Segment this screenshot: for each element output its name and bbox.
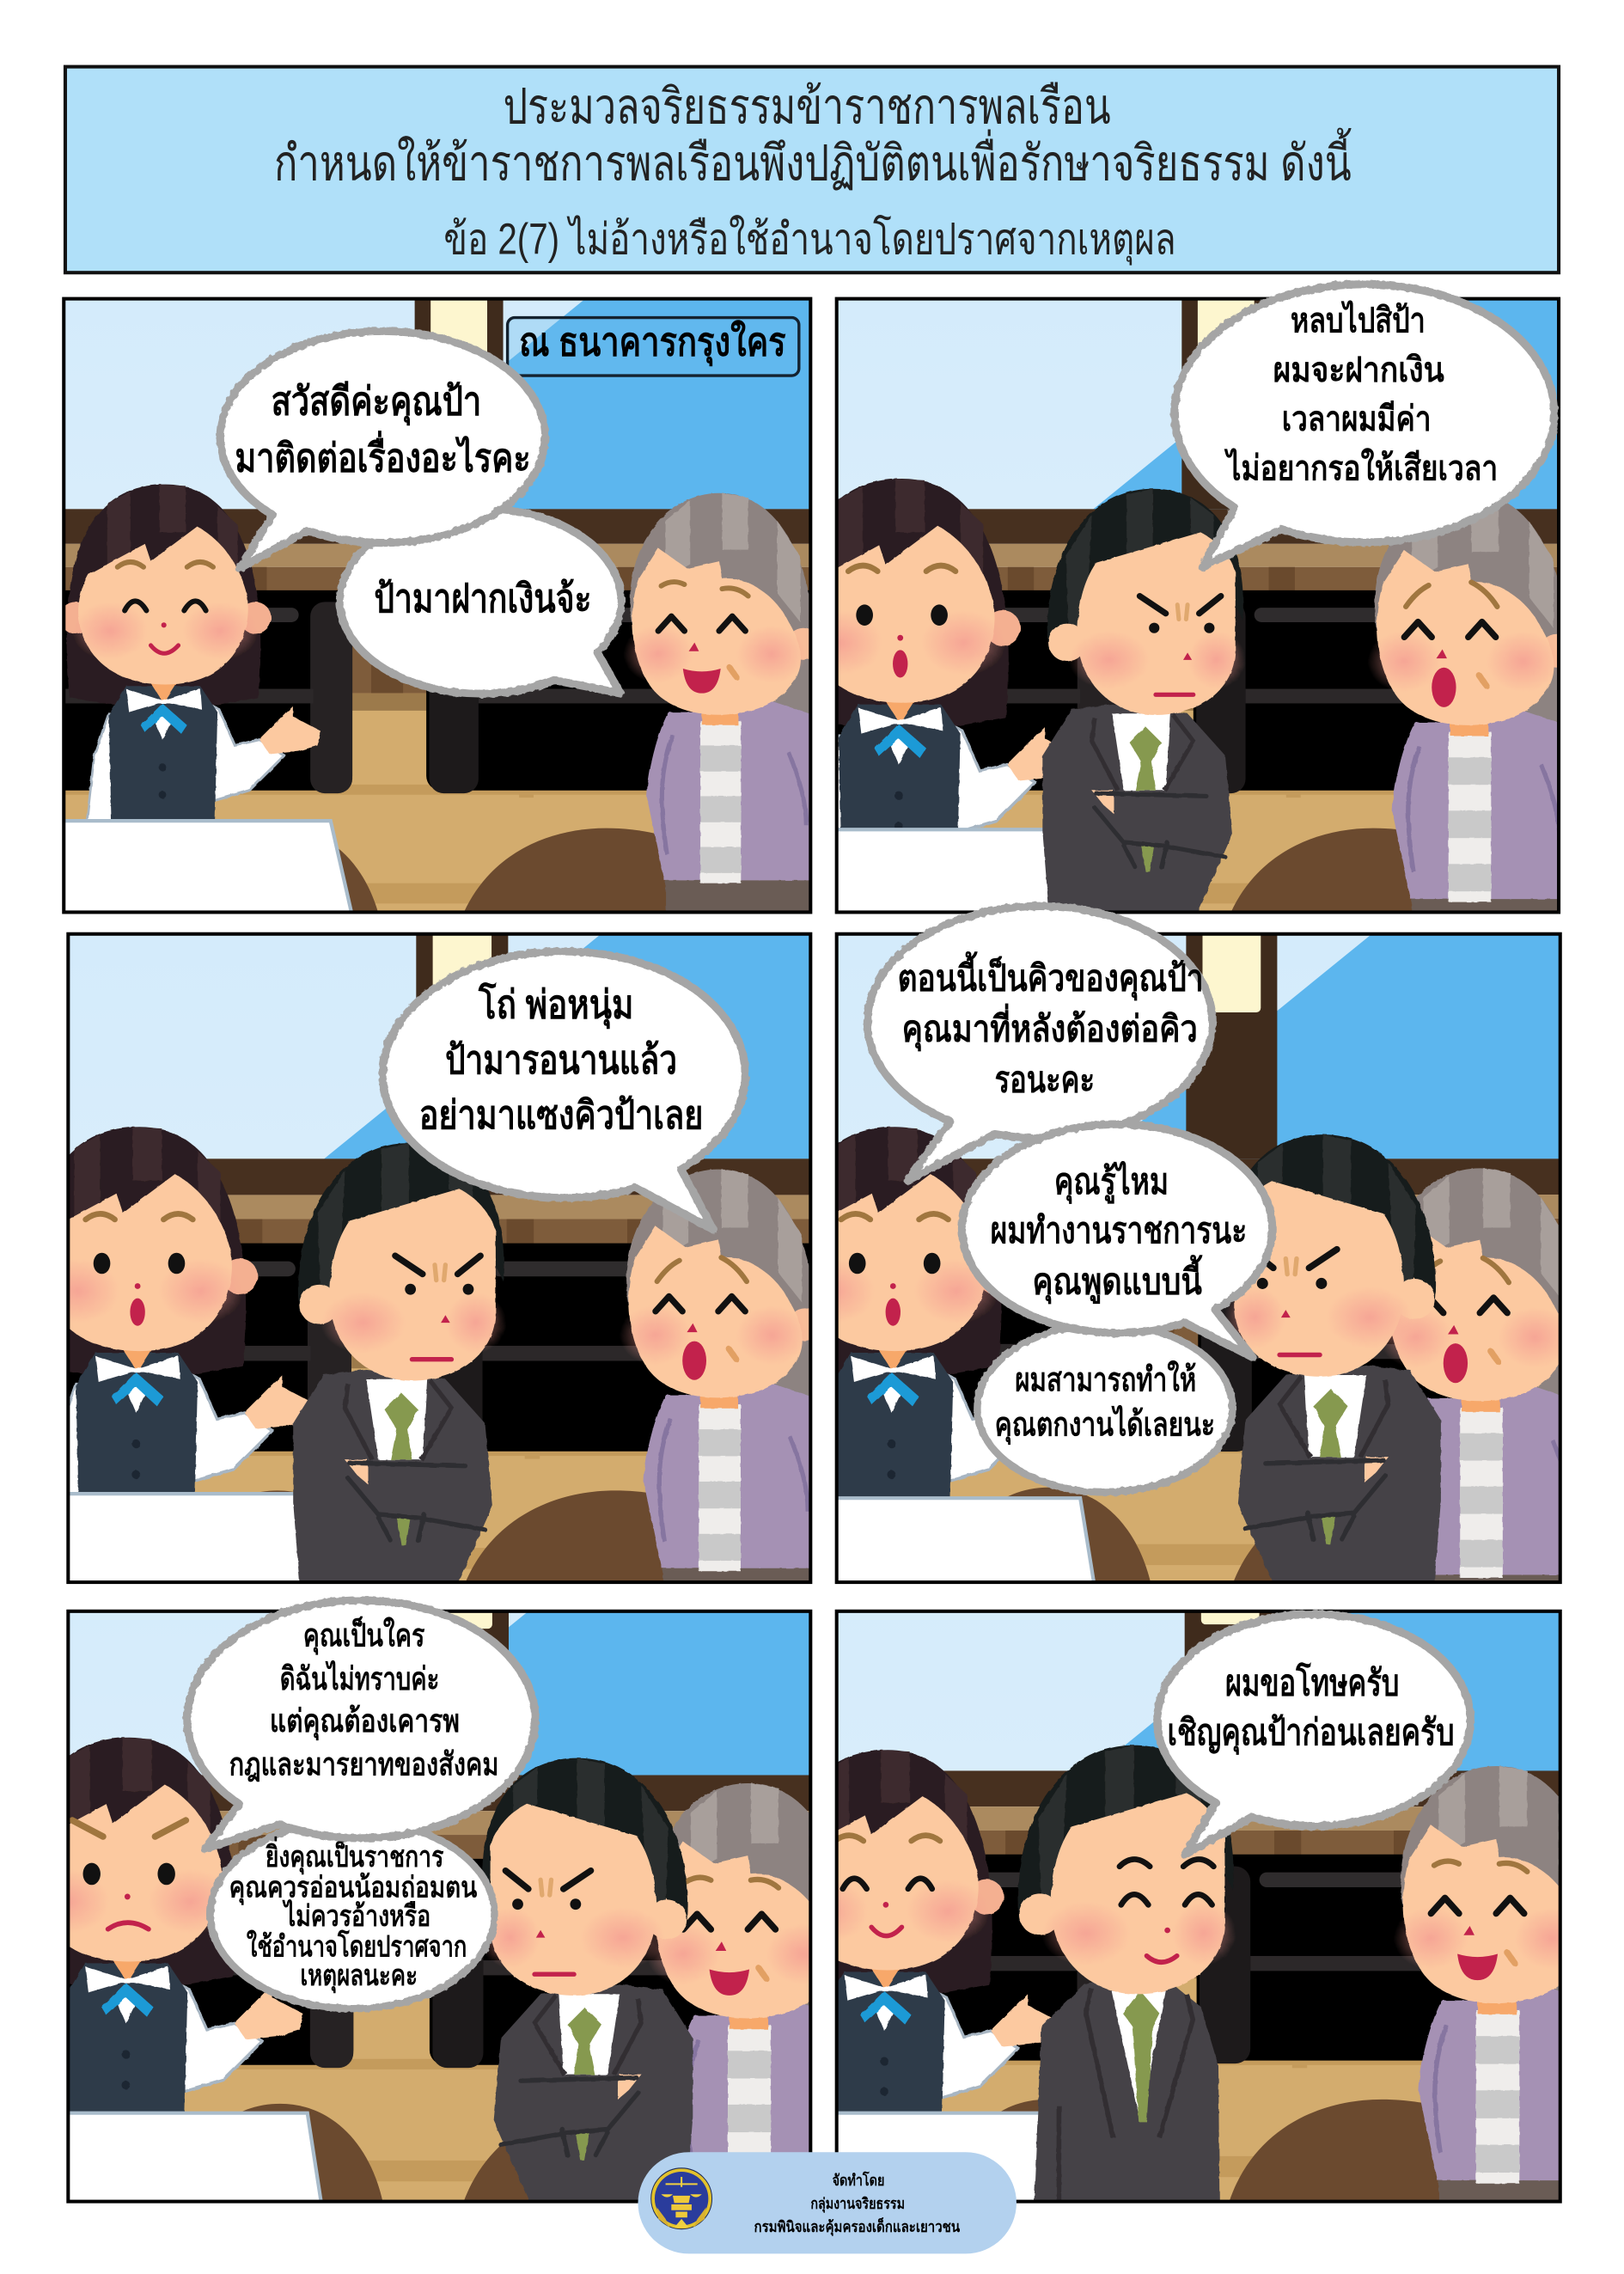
speech bubble: man: ผมจะฝากเงิน [1273, 350, 1444, 389]
panel 3 [66, 932, 813, 1585]
location label [508, 318, 799, 376]
speech bubble: grandmother: ป้ามาฝากเงินจ้ะ [374, 577, 591, 620]
woman clerk surprised [70, 1126, 308, 1492]
panel 2 [835, 279, 1560, 914]
credit text: กรมพินิจและคุ้มครองเด็กและเยาวชน [754, 2216, 961, 2236]
panel 5 scene [0, 1446, 1134, 2248]
speech bubble: clerk [220, 331, 545, 569]
speech bubble: clerk: คุณเป็นใคร [303, 1615, 424, 1655]
panel 6 [558, 1442, 1624, 2258]
speech bubble: clerk: สวัสดีค่ะคุณป้า [272, 380, 481, 426]
woman clerk surprised [776, 1127, 1068, 1586]
speech bubble: grandmother: ป้ามารอนานแล้ว [445, 1038, 677, 1082]
speech bubble: clerk advice: เหตุผลนะคะ [300, 1959, 418, 1994]
speech bubble: man: เวลาผมมีค่า [1282, 399, 1432, 438]
speech bubble: clerk: แต่คุณต้องเคารพ [270, 1702, 460, 1741]
location label: ณ ธนาคารกรุงใคร [519, 319, 786, 366]
panel 5 frame [68, 1611, 810, 2202]
speech bubble: grandmother [382, 951, 745, 1230]
speech bubble: clerk [187, 1600, 535, 1849]
counter [70, 1492, 300, 1581]
speech bubble: clerk advice: ไม่ควรอ้างหรือ [282, 1899, 430, 1933]
grandmother worried [620, 1169, 809, 1580]
credit text: จัดทำโดย [833, 2171, 884, 2189]
speech bubble: grandmother: โถ่ พ่อหนุ่ม [478, 981, 633, 1030]
grandmother worried [1379, 1168, 1585, 1616]
panel 4 [559, 830, 1624, 1633]
speech bubble: clerk advice: ใช้อำนาจโดยปราศจาก [247, 1929, 467, 1963]
speech bubble: clerk advice [211, 1820, 494, 2008]
speech bubble: clerk advice: ยิ่งคุณเป็นราชการ [266, 1836, 443, 1875]
grandmother laughing [1394, 1766, 1603, 2222]
civil servant man angry [1042, 489, 1246, 954]
grandmother pleased [646, 1783, 854, 2235]
speech bubble: clerk: ตอนนี้เป็นคิวของคุณป้า [898, 951, 1204, 1001]
speech bubble: clerk: มาติดต่อเรื่องอะไรคะ [235, 430, 531, 480]
panel 1 scene [65, 301, 809, 911]
civil servant man apologetic [1017, 1745, 1236, 2258]
speech bubble: man [1157, 1614, 1470, 1855]
civil servant man angry, facing left [479, 1758, 693, 2246]
counter [827, 1498, 1095, 1588]
panel 1 frame [64, 299, 810, 912]
panel 4 scene [559, 830, 1624, 1633]
civil servant man angry, facing left [1224, 1134, 1441, 1633]
speech bubble: man [962, 1124, 1273, 1358]
counter [827, 2113, 1088, 2207]
speech bubble: clerk: รอนะคะ [995, 1060, 1095, 1100]
counter [58, 2113, 322, 2207]
panel 6 frame [837, 1611, 1560, 2202]
panel 4 frame [837, 934, 1560, 1582]
panel 6 scene [558, 1442, 1624, 2258]
grandmother laughing [624, 493, 819, 920]
panel 3 frame [68, 934, 810, 1582]
speech bubble: man: คุณรู้ไหม [1054, 1160, 1169, 1204]
panel 2 scene [839, 301, 1557, 911]
panel 2 frame [837, 299, 1559, 912]
speech bubble: clerk advice: คุณควรอ่อนน้อมถ่อมตน [229, 1871, 477, 1905]
speech bubble: clerk [867, 906, 1212, 1181]
speech bubble: man threat: คุณตกงานได้เลยนะ [995, 1405, 1215, 1446]
panel 5 [0, 1446, 1134, 2248]
icon: department seal [651, 2168, 712, 2229]
speech bubble: man: เชิญคุณป้าก่อนเลยครับ [1167, 1712, 1455, 1755]
speech bubble: grandmother: อย่ามาแซงคิวป้าเลย [419, 1093, 703, 1137]
woman clerk surprised [839, 478, 1052, 828]
footer credit pill [638, 2152, 1017, 2253]
speech bubble: clerk: คุณมาที่หลังต้องต่อคิว [902, 1004, 1198, 1052]
panel 1 [62, 297, 813, 914]
counter [839, 828, 1048, 911]
speech bubble: man threat: ผมสามารถทำให้ [1015, 1360, 1196, 1398]
speech bubble: man: คุณพูดแบบนี้ [1033, 1254, 1203, 1304]
title banner [65, 67, 1559, 272]
civil servant man angry [292, 1143, 505, 1581]
heading line 1: ประมวลจริยธรรมข้าราชการพลเรือน [504, 79, 1111, 134]
credit text [754, 2171, 961, 2236]
speech bubble: clerk: กฎและมารยาทของสังคม [229, 1745, 498, 1782]
panel 3 scene [70, 935, 809, 1581]
speech bubble: man: ผมขอโทษครับ [1225, 1661, 1399, 1703]
speech bubble: man: ผมทำงานราชการนะ [991, 1210, 1247, 1250]
woman clerk stern [10, 1738, 302, 2198]
heading line 2: กำหนดให้ข้าราชการพลเรือนพึงปฏิบัติตนเพื่อรักษาจริยธรรม ดังนี้ [274, 127, 1352, 191]
grandmother worried [1370, 504, 1557, 911]
woman clerk smiling [65, 484, 321, 819]
heading line 3: ข้อ 2(7) ไม่อ้างหรือใช้อำนาจโดยปราศจากเหตุผล [443, 214, 1176, 265]
speech bubble: grandmother [340, 508, 621, 694]
speech bubble: man threat [977, 1324, 1232, 1492]
woman clerk smiling [771, 1750, 1058, 2202]
speech bubble: man: ไม่อยากรอให้เสียเวลา [1224, 448, 1498, 488]
counter [58, 821, 352, 916]
credit text: กลุ่มงานจริยธรรม [810, 2195, 905, 2213]
speech bubble: man [1175, 284, 1554, 567]
speech bubble: man: หลบไปสิป้า [1291, 299, 1426, 339]
speech bubble: clerk: ดิฉันไม่ทราบค่ะ [280, 1660, 439, 1696]
